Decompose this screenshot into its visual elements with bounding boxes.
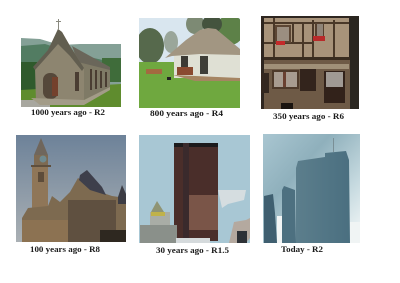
hut wall xyxy=(174,54,240,78)
caption: 100 years: 100 years ago - R8 xyxy=(30,244,100,254)
caption: 1000 years: 1000 years ago - R2 xyxy=(31,107,105,117)
photo: old city hall xyxy=(16,135,126,242)
main building xyxy=(22,178,126,230)
caption: 350 years: 350 years ago - R6 xyxy=(273,111,344,121)
arched door xyxy=(43,73,58,99)
photo: stone church xyxy=(21,19,121,107)
photo: thatched hut xyxy=(139,18,240,108)
thatched roof xyxy=(165,28,240,58)
nave wall xyxy=(80,62,110,100)
photo: modern glass tower xyxy=(263,134,360,243)
front gable xyxy=(35,29,84,102)
right buildings xyxy=(229,218,250,243)
caption: today: Today - R2 xyxy=(281,244,323,254)
old tower xyxy=(151,201,164,212)
photo: half-timbered house xyxy=(261,16,359,109)
caption: 800 years: 800 years ago - R4 xyxy=(150,108,224,118)
clock tower xyxy=(31,138,51,208)
tower xyxy=(174,143,218,241)
cross xyxy=(56,19,61,29)
nave roof xyxy=(72,46,110,70)
caption: 30 years: 30 years ago - R1.5 xyxy=(156,245,229,255)
photo: dark office tower xyxy=(139,135,250,243)
